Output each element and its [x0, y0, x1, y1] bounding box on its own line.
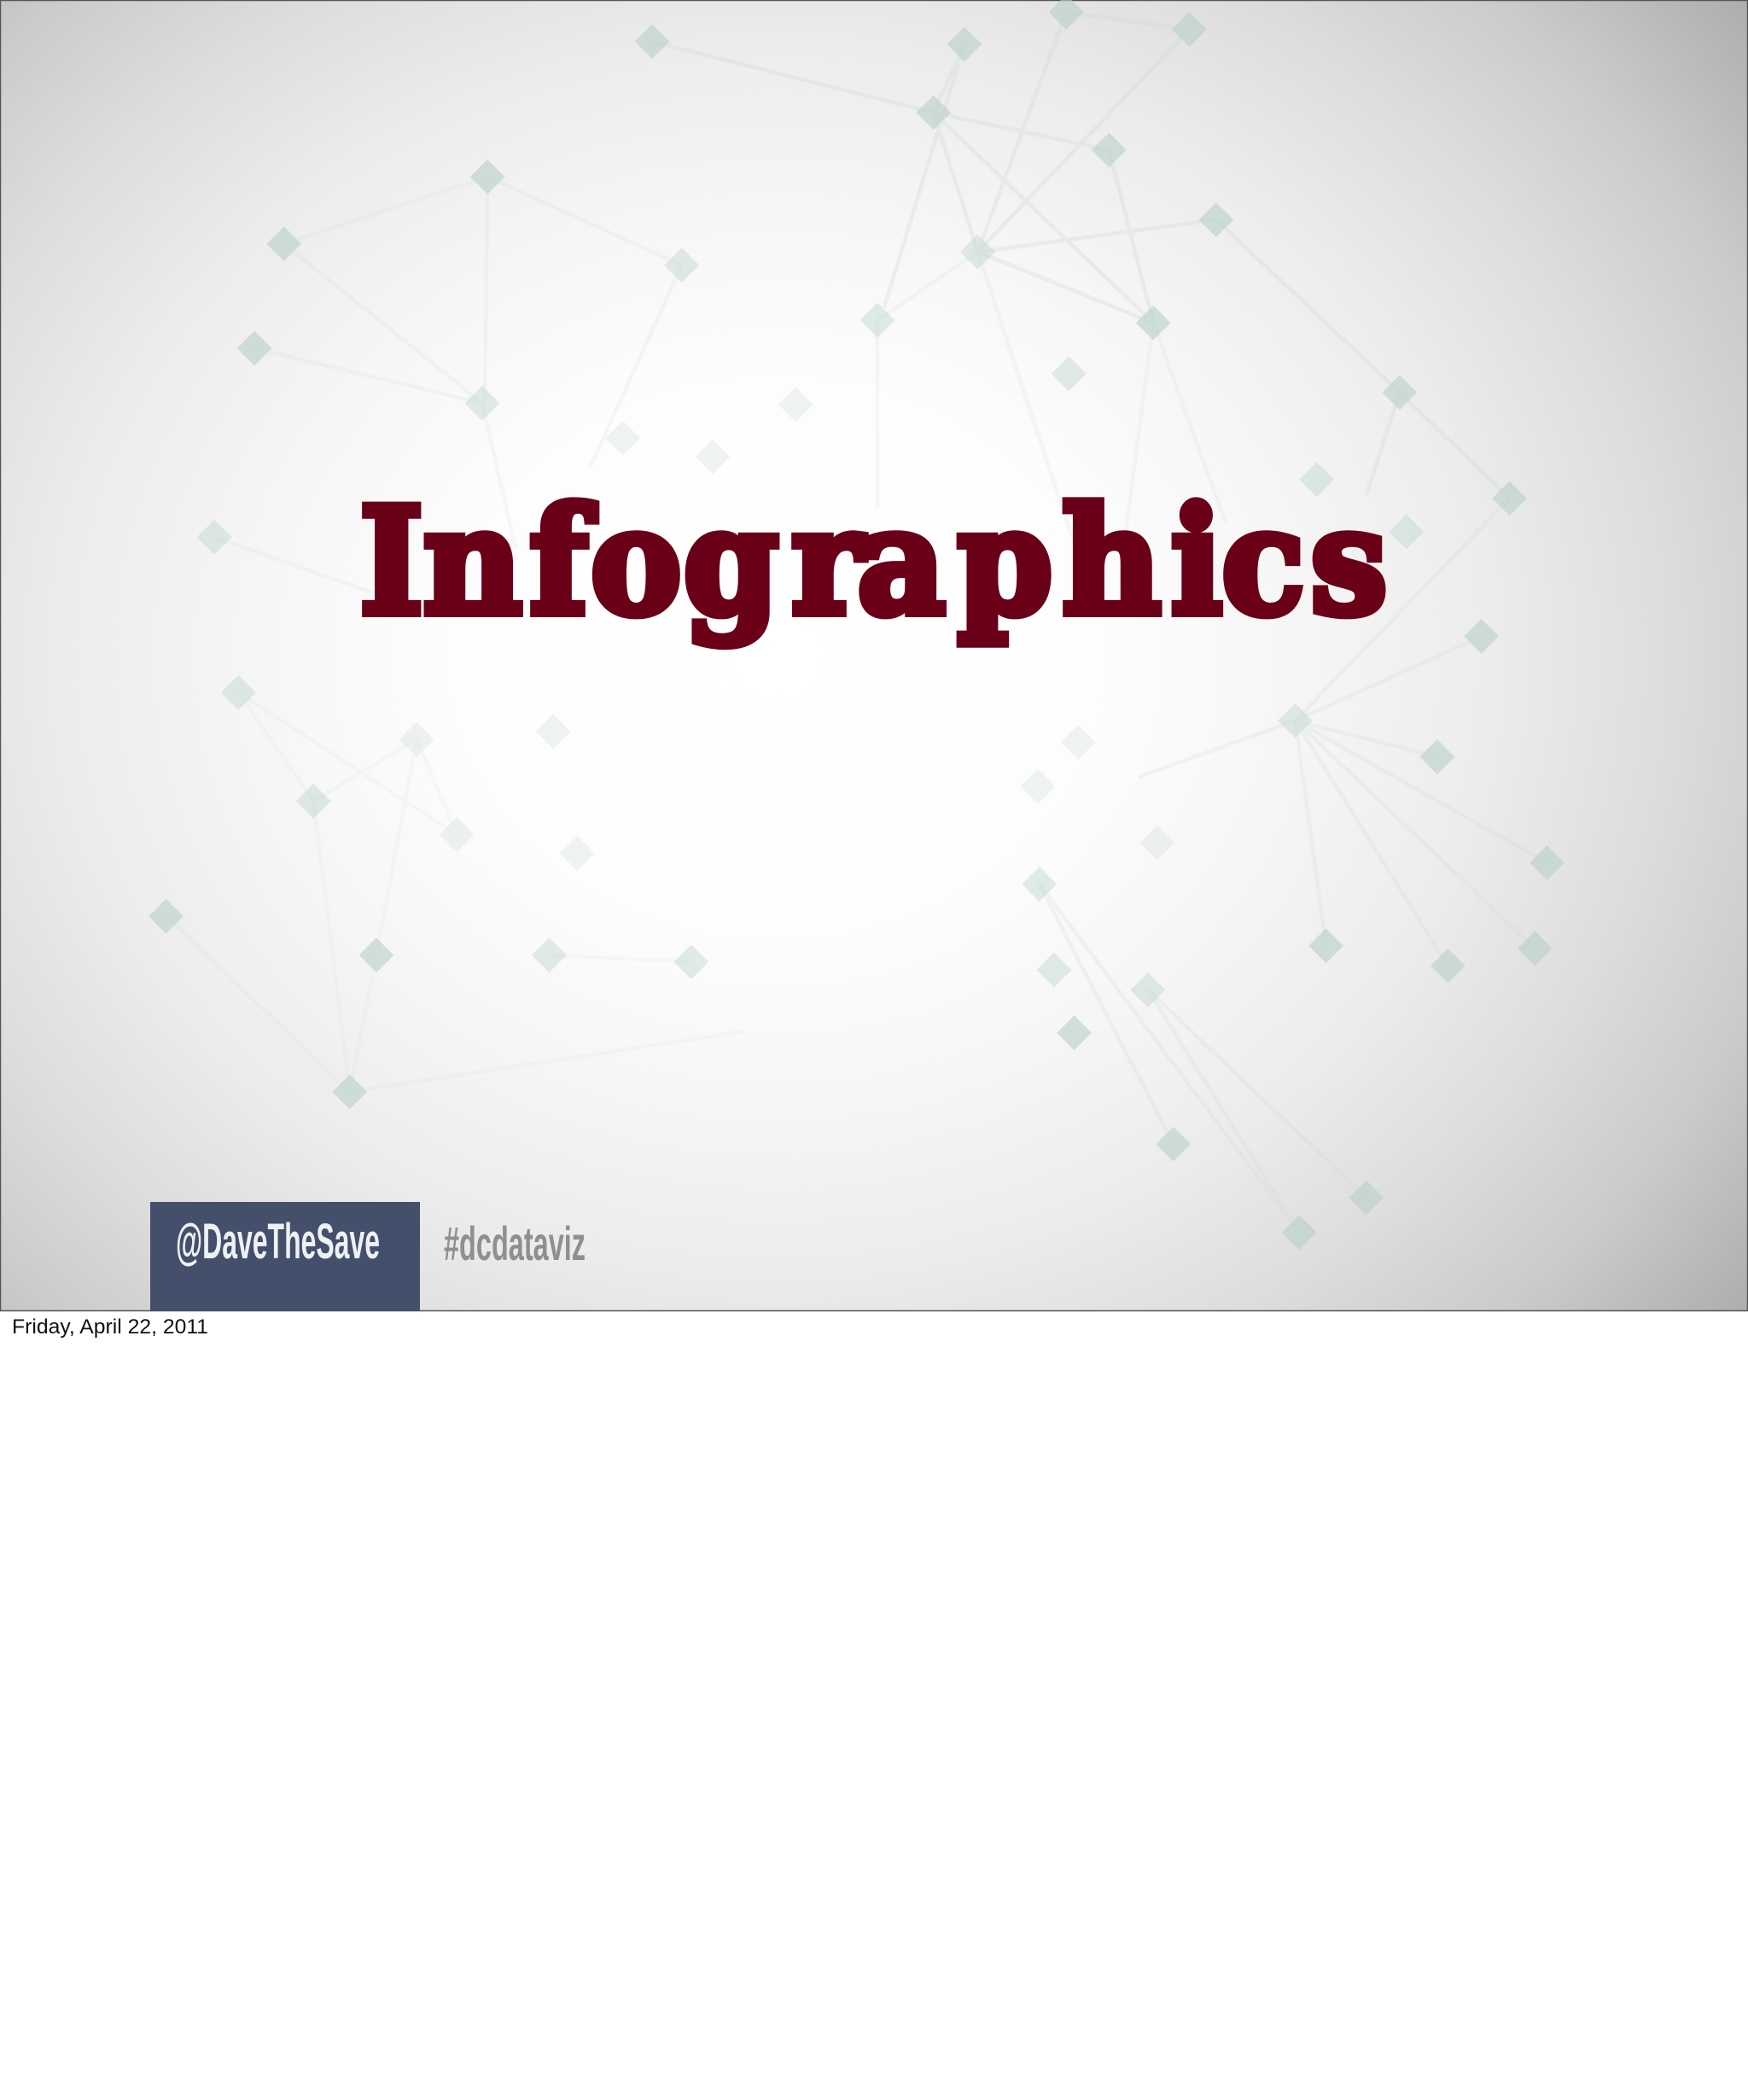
- handle text: @DaveTheSave: [176, 1214, 380, 1269]
- slide background: [0, 0, 1748, 1311]
- diamond nodes, middle: [197, 235, 1424, 1007]
- hashtag: #dcdataviz: [444, 1216, 586, 1270]
- title: Infographics: [359, 475, 1387, 648]
- date caption: Friday, April 22, 2011: [12, 1315, 208, 1339]
- diamond nodes, faintest near title: [399, 388, 1174, 871]
- network lines: [166, 12, 1547, 1233]
- network graphic: connecting lines and diamond nodes: [149, 0, 1564, 1250]
- diamond nodes, outer: [149, 0, 1564, 1250]
- handle box: [150, 1202, 420, 1311]
